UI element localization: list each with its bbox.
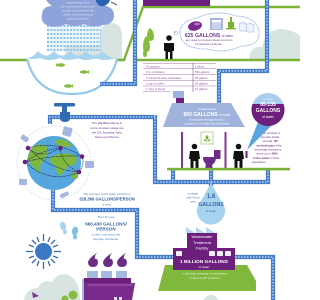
text: beer production: operations. xyxy=(252,160,267,164)
callout: 85-135 gallons circle: to make xyxy=(263,97,273,101)
text: toilet flush: a single xyxy=(188,192,198,196)
house: 800 gallons roof: It takes about xyxy=(198,107,216,111)
routes xyxy=(25,145,83,177)
text: US uses: PERSON xyxy=(96,226,116,232)
factory building xyxy=(82,278,135,300)
person left xyxy=(189,144,200,169)
text: top five nations: terms of water usage are xyxy=(90,126,124,130)
callout: 625 gallons: are used to process these common xyxy=(186,38,233,42)
purple top bar xyxy=(143,0,210,6)
text: toilet flush: toilet flush xyxy=(186,196,200,200)
callout: 85-135 gallons circle: GALLONS xyxy=(256,108,281,114)
wastewater plant: treated by 88 solutions. xyxy=(189,276,221,280)
text: beer production: to produce a xyxy=(264,131,281,135)
table: water per product: 500 gallons xyxy=(195,70,210,74)
rain dots xyxy=(47,24,101,50)
table: water per product: 1 cup of coffee xyxy=(146,82,165,86)
factory chimneys xyxy=(87,271,127,278)
text: average world water footprint: 328,366 GALLONS/PERSON xyxy=(79,196,135,202)
drop 1.6 gallons: of water xyxy=(206,209,216,213)
pipes xyxy=(50,0,273,300)
tap xyxy=(54,103,75,122)
drop 1.6 gallons: GALLONS xyxy=(198,202,224,208)
text: top five nations: the US, Australia, Italy, xyxy=(92,130,122,134)
text: beer production: beverage producers xyxy=(255,148,282,152)
globe xyxy=(17,126,94,200)
lake bowl xyxy=(27,51,117,94)
text: toilet flush xyxy=(186,192,200,204)
text: top five nations: The top five nations in xyxy=(92,121,123,125)
continents xyxy=(28,139,78,179)
table: water per product: 10 gallons xyxy=(195,87,208,91)
icon: purple toilet xyxy=(203,150,220,169)
wastewater plant: 1 BILLION GALLONS xyxy=(180,259,229,265)
cloud with text: energy is required for the xyxy=(62,8,94,12)
callout: 85-135 gallons circle: 85-135 xyxy=(260,102,276,108)
icon: green bottle cup xyxy=(226,17,236,29)
text: beer production xyxy=(252,131,282,164)
pipe dots xyxy=(50,0,273,300)
wastewater plant: is the daily average of wastewater xyxy=(182,272,228,276)
table: water per product: it takes... xyxy=(195,64,206,68)
table: water per product: 35 gallons xyxy=(195,76,208,80)
drop 1.6 gallons: 1.6 xyxy=(207,194,216,200)
footprints icon xyxy=(59,221,79,240)
green ground line and mountain xyxy=(0,7,300,60)
table: water per product: 1 slice of bread xyxy=(146,87,165,91)
grey hills top xyxy=(65,23,300,60)
table: water per product: 1 printed Sunday newspaper xyxy=(146,76,182,80)
text: toilet flush: uses xyxy=(190,200,197,204)
text: US uses: 660,430 GALLONS/ xyxy=(85,222,128,226)
icon: sun xyxy=(26,234,61,269)
text: beer production: of soda. 3D xyxy=(262,139,279,143)
ground under house xyxy=(167,168,290,170)
icon: white shirts xyxy=(239,22,254,32)
wastewater plant: Facility xyxy=(196,246,208,250)
text: US uses: a year, over twice the xyxy=(92,232,120,236)
text: beer production: technologies help xyxy=(256,144,282,148)
callout: 85-135 gallons circle: of water xyxy=(262,115,275,119)
text: US uses: average worldwide. xyxy=(93,237,119,241)
bottom right grey bush xyxy=(203,295,219,300)
wastewater plant: of water xyxy=(199,265,209,269)
house: 800 gallons roof: 1 person in a single day worldwide. xyxy=(184,122,231,126)
text: average world water footprint: The average world water footprint is xyxy=(83,192,131,196)
drop 1.6 gallons xyxy=(197,183,225,225)
text: US uses: The US uses xyxy=(97,215,115,219)
cloud with text: safety of an increasing xyxy=(64,12,93,16)
nation markers xyxy=(23,146,84,174)
callout: 85-135 gallons circle xyxy=(251,93,284,126)
wastewater plant: Treatment xyxy=(193,240,212,245)
wastewater plant xyxy=(158,227,256,291)
callout tail xyxy=(247,122,272,150)
text: average world water footprint xyxy=(79,192,135,206)
cloud with text xyxy=(42,0,114,27)
house: 800 gallons roof xyxy=(163,91,245,127)
table: water per product: To produce... xyxy=(146,64,162,68)
table: water per product xyxy=(143,63,216,92)
grey bushes bottom xyxy=(24,274,80,300)
house: 800 gallons roof: 800 GALLONS of water xyxy=(184,112,231,118)
green tree circles xyxy=(62,290,78,300)
person right with bottle xyxy=(233,144,248,169)
callout: 625 gallons: 625 GALLONS of water xyxy=(185,33,234,39)
tree xyxy=(143,28,154,57)
cloud with text: representing 20 to xyxy=(66,0,90,4)
person with thought bubble xyxy=(164,31,178,59)
text: average world water footprint: a year. xyxy=(102,202,112,206)
text: beer production: move up to 50% xyxy=(256,152,278,156)
cloud with text: the world's grey water use, xyxy=(61,4,95,8)
table: water per product: 35 gallons xyxy=(195,82,208,86)
purple drops xyxy=(88,252,127,267)
house: 800 gallons roof: to produce enough food for xyxy=(189,118,225,122)
table: water per product: 1 lb. of chicken xyxy=(146,70,165,74)
fish xyxy=(56,63,89,88)
text: beer production: two-liter bottle xyxy=(261,135,280,139)
text: US uses xyxy=(85,215,128,241)
text: beer production: of the water in their xyxy=(253,156,279,160)
icon: purple plate xyxy=(187,20,203,32)
icon: newspaper xyxy=(210,18,223,30)
text: top five nations: Japan and Mexico. xyxy=(94,135,120,139)
callout: 625 gallons xyxy=(180,13,259,51)
text: top five nations xyxy=(90,121,124,139)
house columns xyxy=(181,132,226,169)
cloud with text: global population xyxy=(67,16,89,20)
blue umbrella icon xyxy=(96,0,117,6)
wastewater plant: Wastewater xyxy=(192,234,213,239)
icon: green leaf sign xyxy=(201,132,213,144)
callout: 625 gallons: household products. xyxy=(195,42,223,46)
roof triangles xyxy=(186,227,215,233)
small purple pennant xyxy=(32,292,39,298)
globe orbit icons xyxy=(19,126,94,199)
